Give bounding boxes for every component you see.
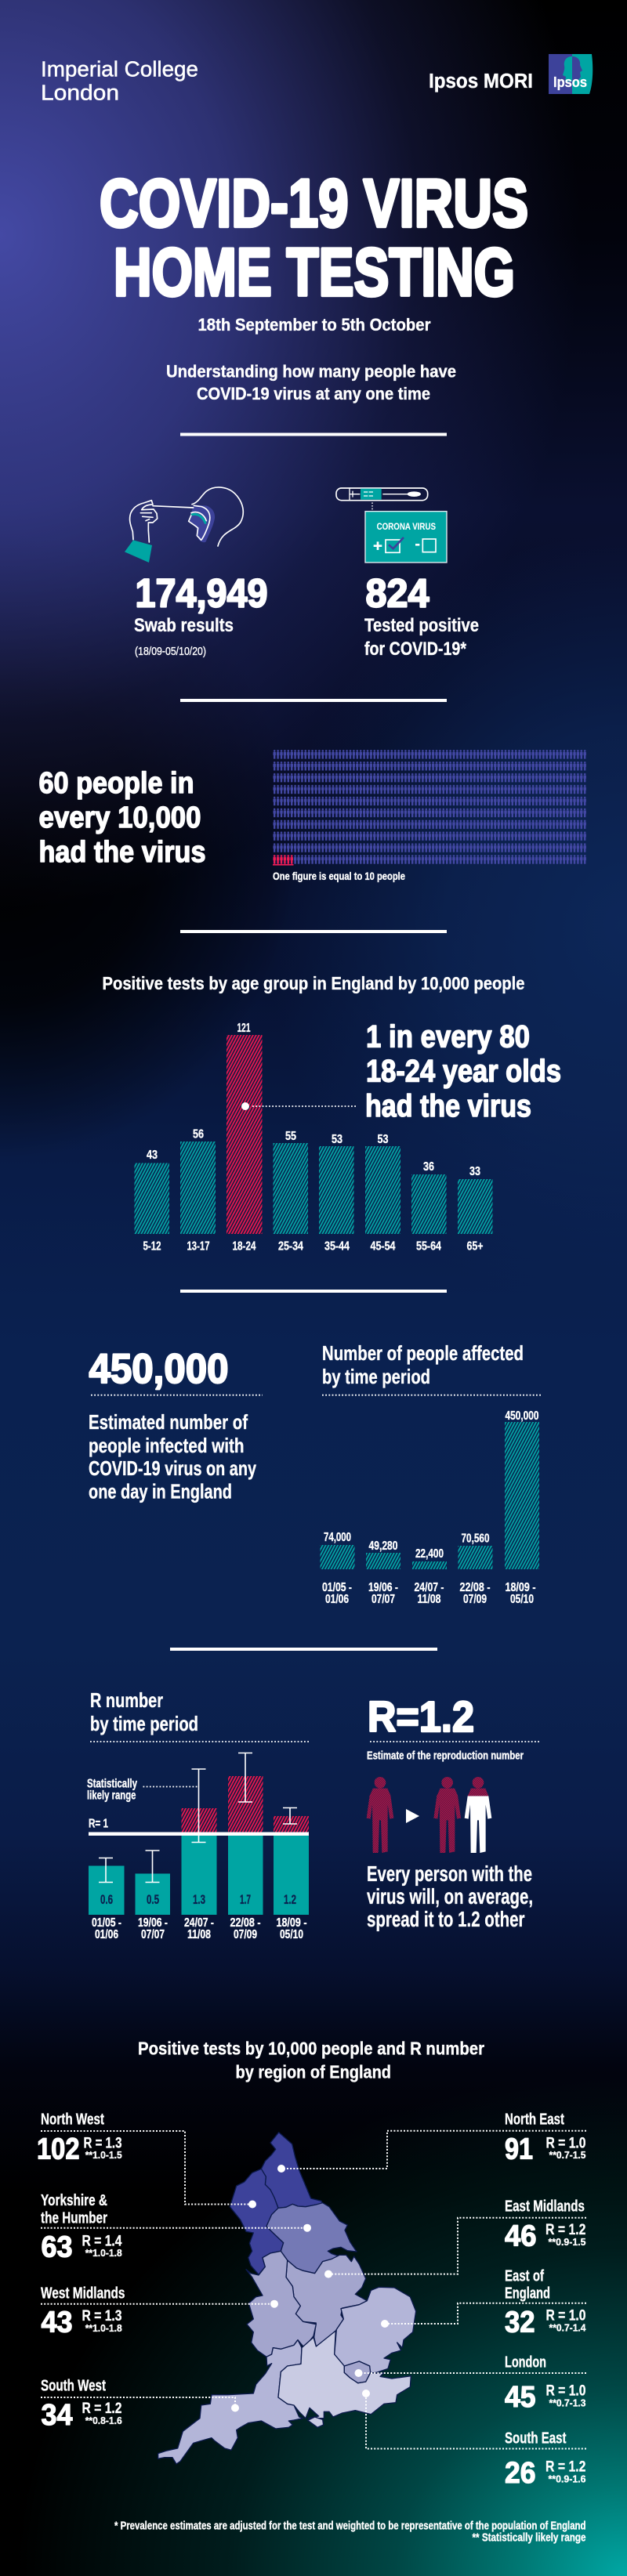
logo: Ipsos badge: Ipsos [553, 74, 587, 90]
footnotes: ** Statistically likely range [472, 2532, 586, 2545]
logo: Imperial College London [41, 56, 198, 105]
region: North West: **1.0-1.5 [85, 2150, 122, 2161]
bar chart: people affected by time period: 05/10 [510, 1593, 534, 1606]
region: Yorkshire & the Humber: R = 1.4 [82, 2233, 122, 2250]
region: South West [41, 2377, 239, 2432]
text: spread explanation: spread it to 1.2 other [367, 1907, 525, 1931]
region: South West: South West [41, 2377, 106, 2394]
bar chart: R number by time period: 0.6 [100, 1892, 113, 1907]
icon: test tube and result card: CORONA VIRUS [377, 521, 436, 532]
pictogram caption: One figure is equal to 10 people [273, 870, 405, 882]
bar chart: R number by time period: 0.5 [147, 1892, 159, 1907]
title [100, 166, 528, 310]
bar chart: people affected by time period: 01/06 [325, 1593, 349, 1606]
callout: 1 in every 80 [241, 1020, 561, 1123]
stat: 450,000 estimated infected [89, 1346, 263, 1503]
stat: 450,000 estimated infected: one day in England [89, 1479, 232, 1503]
bar chart: positive tests by age: 13-17 [187, 1239, 210, 1254]
icon: person spreads to 1.2 others [367, 1777, 491, 1853]
bar chart: positive tests by age: 18-24 [232, 1239, 256, 1254]
stat: 450,000 estimated infected: Estimated number of [89, 1410, 248, 1434]
stat: 450,000 estimated infected: COVID-19 virus on any [89, 1456, 256, 1480]
bar chart: positive tests by age: 35-44 [324, 1239, 350, 1254]
heading: positive tests by region: by region of England [235, 2062, 391, 2082]
bar chart: people affected by time period: 22/08 - [459, 1581, 491, 1594]
bar chart: R number by time period: 1.3 [193, 1892, 205, 1907]
callout: 1 in every 80: had the virus [365, 1089, 531, 1123]
bar chart: people affected by time period: 450,000 [505, 1409, 539, 1423]
bar chart: positive tests by age: 45-54 [370, 1239, 396, 1254]
region: London: London [505, 2353, 546, 2371]
heading: positive tests by region: Positive tests by 10,000 people and R number [138, 2039, 484, 2059]
bar chart: people affected by time period: 01/05 - [322, 1581, 352, 1594]
region: East of England: East of [505, 2267, 544, 2285]
bar chart: people affected by time period: 18/09 - [505, 1581, 536, 1594]
region: East Midlands: East Midlands [505, 2197, 585, 2216]
bar chart: people affected by time period: 24/07 - [414, 1581, 444, 1594]
stat: tested positive: 824 [365, 570, 429, 616]
callout: 60 in 10,000: every 10,000 [39, 801, 201, 834]
subtitle: dates: 18th September to 5th October [198, 315, 431, 335]
bar chart: positive tests by age: 65+ [467, 1239, 483, 1254]
stat: swab results: Swab results [134, 615, 234, 636]
bar chart: people affected by time period: 22,400 [415, 1547, 444, 1561]
bar chart: positive tests by age: 43 [147, 1149, 158, 1162]
region: South East: R = 1.2 [545, 2458, 586, 2476]
region: West Midlands: 43 [41, 2306, 72, 2339]
heading: R number by time period: by time period [90, 1712, 198, 1735]
bar chart: R number by time period: 05/10 [280, 1928, 303, 1941]
region: North East: R = 1.0 [545, 2136, 586, 2151]
heading: people affected by time period: by time period [322, 1365, 430, 1388]
logo: Ipsos MORI wordmark: Ipsos MORI [429, 71, 533, 92]
stat: R = 1.2 [367, 1692, 541, 1763]
bar chart: positive tests by age: 36 [423, 1160, 434, 1174]
bar chart: R number by time period: 22/08 - [230, 1916, 260, 1930]
region: Yorkshire & the Humber: Yorkshire & [41, 2191, 107, 2209]
region: West Midlands: R = 1.3 [82, 2308, 122, 2325]
heading: people affected by time period [322, 1341, 541, 1395]
region: London: 45 [505, 2381, 536, 2414]
callout: 60 in 10,000: had the virus [39, 836, 205, 869]
region: East Midlands: R = 1.2 [545, 2222, 586, 2238]
bar chart: people affected by time period: 07/09 [463, 1593, 487, 1606]
bar chart: positive tests by age: 53 [332, 1133, 342, 1146]
region: West Midlands: West Midlands [41, 2285, 125, 2302]
footnotes [114, 2520, 586, 2545]
region: London: R = 1.0 [545, 2383, 586, 2399]
bar chart: R number by time period: 1.2 [284, 1892, 296, 1907]
region: South East [362, 2390, 586, 2490]
region: East Midlands: 46 [505, 2220, 536, 2253]
bar chart: R number by time period: 24/07 - [184, 1916, 214, 1930]
bar chart: people affected by time period: 74,000 [324, 1531, 351, 1544]
intro text [166, 362, 456, 403]
bar chart: positive tests by age: 5-12 [143, 1239, 161, 1254]
map: England regions [158, 2133, 416, 2464]
stat: R = 1.2: R=1.2 [368, 1692, 474, 1741]
region: East of England: England [505, 2285, 550, 2302]
region: North East: **0.7-1.5 [549, 2150, 586, 2161]
region: Yorkshire & the Humber: **1.0-1.8 [85, 2248, 122, 2259]
region: South East: 26 [505, 2457, 536, 2490]
bar chart: R number by time period: 11/08 [187, 1928, 211, 1941]
bar chart: R number by time period: 18/09 - [276, 1916, 307, 1930]
bar chart: people affected by time period: 70,560 [461, 1532, 490, 1545]
logo: Ipsos badge [549, 54, 593, 94]
stat: tested positive [364, 570, 479, 660]
bar chart: positive tests by age: 25-34 [278, 1239, 303, 1254]
icon: nasal swab [125, 487, 243, 563]
bar chart: R number by time period: R= 1 [89, 1818, 108, 1830]
region: South West: **0.8-1.6 [85, 2415, 122, 2426]
pictogram: people grid [273, 750, 586, 867]
text: spread explanation: Every person with the [367, 1861, 532, 1886]
stat: tested positive: for COVID-19* [364, 639, 467, 660]
bar chart: R number by time period: 07/09 [234, 1928, 257, 1941]
bar chart: R number by time period: likely range [87, 1789, 136, 1802]
icon: test tube and result card [336, 488, 447, 563]
region: North West: R = 1.3 [83, 2136, 122, 2151]
region: South East: **0.9-1.6 [549, 2474, 586, 2485]
region: South East: South East [505, 2429, 567, 2448]
callout: 1 in every 80: 18-24 year olds [366, 1055, 561, 1089]
region: East of England: 32 [505, 2306, 535, 2339]
bar chart: positive tests by age: 55 [285, 1130, 296, 1143]
region: North East: North East [505, 2111, 564, 2128]
heading: R number by time period: R number [90, 1688, 163, 1712]
bar chart: positive tests by age: 121 [237, 1022, 251, 1035]
bar chart: positive tests by age [135, 1022, 492, 1254]
bar chart: people affected by time period [320, 1409, 539, 1606]
region: North East [277, 2111, 586, 2173]
bar chart: R number by time period: 01/05 - [92, 1916, 121, 1930]
stat: swab results [134, 570, 268, 658]
callout: 60 in 10,000 [39, 767, 205, 869]
region: Yorkshire & the Humber [41, 2191, 311, 2264]
intro text: COVID-19 virus at any one time [197, 384, 430, 403]
region: West Midlands [41, 2285, 278, 2339]
region: North West: 102 [37, 2133, 80, 2165]
bar chart: positive tests by age: 56 [193, 1128, 204, 1141]
bar chart: people affected by time period: 49,280 [368, 1539, 398, 1553]
logo: Imperial College London: London [41, 80, 119, 105]
region: South West: 34 [41, 2399, 72, 2432]
region: East Midlands [324, 2197, 586, 2278]
callout: 1 in every 80: 1 in every 80 [366, 1020, 530, 1055]
region: North West [37, 2111, 256, 2208]
region: North West: North West [41, 2111, 104, 2128]
region: East of England: **0.7-1.4 [549, 2322, 586, 2333]
region: West Midlands: **1.0-1.8 [85, 2323, 122, 2334]
title: HOME TESTING [114, 235, 515, 310]
region: East Midlands: **0.9-1.5 [549, 2237, 586, 2248]
stat: 450,000 estimated infected: 450,000 [89, 1346, 229, 1392]
bar chart: people affected by time period: 19/06 - [368, 1581, 398, 1594]
region: London: **0.7-1.3 [549, 2397, 586, 2408]
text: spread explanation [367, 1861, 533, 1931]
stat: tested positive: Tested positive [364, 615, 479, 636]
stat: swab results: 174,949 [135, 570, 268, 616]
text: spread explanation: virus will, on average, [367, 1884, 533, 1908]
heading: positive tests by age: Positive tests by age group in England by 10,000 people [102, 973, 525, 993]
region: East of England: R = 1.0 [545, 2308, 586, 2324]
region: Yorkshire & the Humber: the Humber [41, 2209, 107, 2227]
region: North East: 91 [505, 2133, 533, 2165]
bar chart: positive tests by age: 53 [378, 1133, 389, 1146]
bar chart: R number by time period: 07/07 [141, 1928, 165, 1941]
heading: people affected by time period: Number of people affected [322, 1341, 524, 1365]
bar chart: positive tests by age: 33 [469, 1165, 480, 1178]
title: COVID-19 VIRUS [100, 166, 528, 241]
stat: 450,000 estimated infected: people infected with [89, 1434, 245, 1457]
bar chart: people affected by time period: 11/08 [417, 1593, 441, 1606]
region: London [354, 2353, 586, 2414]
bar chart: people affected by time period: 07/07 [371, 1593, 395, 1606]
heading: R number by time period [90, 1688, 310, 1742]
bar chart: positive tests by age: 55-64 [416, 1239, 441, 1254]
bar chart: R number by time period: Statistically [87, 1777, 137, 1791]
heading: positive tests by region [138, 2039, 484, 2082]
bar chart: R number by time period: 1.7 [240, 1892, 251, 1907]
region: South West: R = 1.2 [82, 2401, 122, 2417]
bar chart: R number by time period: 19/06 - [138, 1916, 168, 1930]
stat: R = 1.2: Estimate of the reproduction number [367, 1749, 524, 1763]
bar chart: R number by time period: 01/06 [95, 1928, 118, 1941]
bar chart: R number by time period [87, 1753, 309, 1941]
region: Yorkshire & the Humber: 63 [41, 2231, 72, 2264]
callout: 60 in 10,000: 60 people in [39, 767, 194, 800]
region: East of England [381, 2267, 586, 2339]
logo: Imperial College London: Imperial College [41, 56, 198, 81]
stat: swab results: (18/09-05/10/20) [135, 646, 206, 658]
intro text: Understanding how many people have [166, 362, 456, 381]
